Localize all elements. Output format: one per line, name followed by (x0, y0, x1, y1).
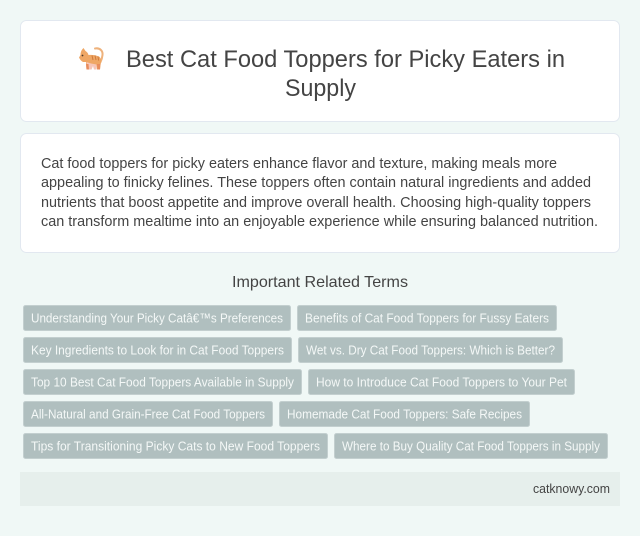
footer: catknowy.com (533, 481, 610, 496)
tag: All-Natural and Grain-Free Cat Food Toppers (31, 406, 265, 422)
tag: Wet vs. Dry Cat Food Toppers: Which is Better? (306, 342, 555, 358)
panel: title card (20, 20, 620, 122)
intro paragraph: Cat food toppers for picky eaters enhance flavor and texture, making meals more (41, 155, 557, 172)
tag (298, 338, 562, 362)
tag: How to Introduce Cat Food Toppers to Your Pet (316, 374, 567, 390)
title: Supply (285, 75, 356, 102)
tag (280, 402, 530, 426)
tag (24, 370, 302, 394)
footer (20, 472, 620, 506)
tag (308, 370, 574, 394)
tag (334, 434, 608, 458)
tag: Tips for Transitioning Picky Cats to New Food Toppers (31, 438, 320, 454)
panel: intro text (20, 134, 620, 252)
tag: Understanding Your Picky Catâ€™s Preferences (31, 310, 283, 326)
tag: Key Ingredients to Look for in Cat Food Toppers (31, 342, 284, 358)
tag (24, 306, 290, 330)
intro paragraph: nutrients that boost appetite and improve overall health. Choosing high-quality toppers (41, 194, 591, 211)
icon: cat (79, 48, 103, 70)
tag: Benefits of Cat Food Toppers for Fussy Eaters (305, 310, 549, 326)
tag: Where to Buy Quality Cat Food Toppers in Supply (342, 438, 600, 454)
title: Best Cat Food Toppers for Picky Eaters in (126, 46, 565, 73)
title (126, 46, 565, 102)
tag (24, 434, 328, 458)
tag (24, 402, 272, 426)
intro paragraph: can transform mealtime into an enjoyable experience while ensuring balanced nutrition. (41, 213, 598, 230)
tag list (24, 306, 608, 458)
intro paragraph (41, 155, 598, 230)
heading: related terms: Important Related Terms (232, 274, 408, 291)
tag (24, 338, 292, 362)
tag (298, 306, 556, 330)
tag: Top 10 Best Cat Food Toppers Available in Supply (31, 374, 294, 390)
tag: Homemade Cat Food Toppers: Safe Recipes (287, 406, 522, 422)
intro paragraph: appealing to finicky felines. These toppers often contain natural ingredients and added (41, 174, 591, 191)
